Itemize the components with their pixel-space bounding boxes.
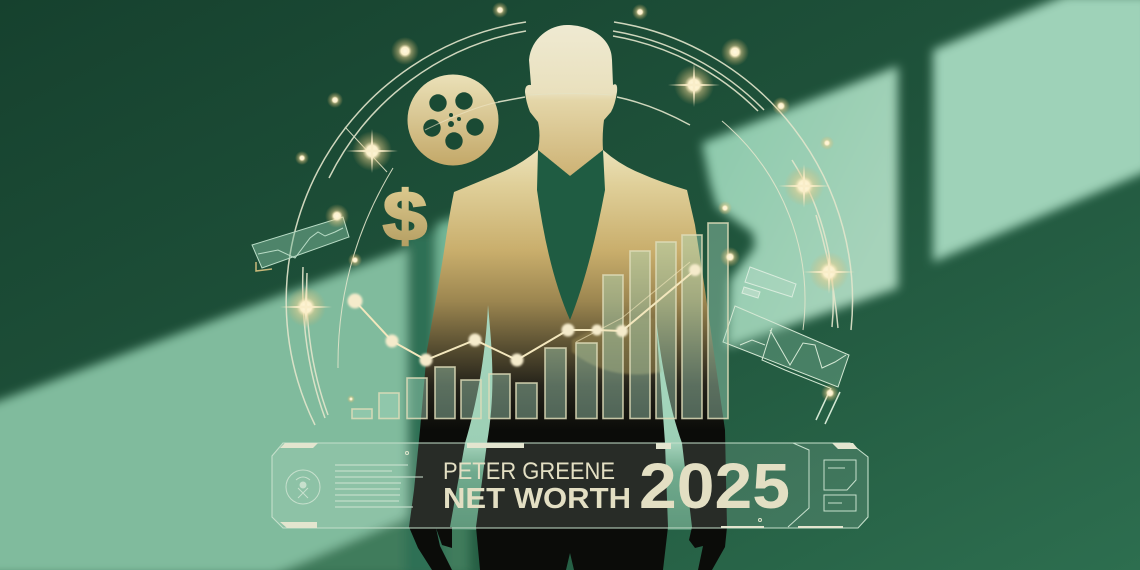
second arc left	[329, 31, 526, 178]
panel dots	[406, 452, 762, 522]
gap: right	[655, 303, 700, 530]
head line	[530, 94, 612, 95]
icon: dollar sign: $	[383, 177, 427, 255]
panel text: name: PETER GREENE	[443, 458, 615, 485]
light patch: far right	[933, 0, 1140, 262]
floating chart: right small	[742, 267, 796, 298]
reel line	[425, 102, 500, 130]
line chart	[348, 262, 701, 366]
title panel	[272, 443, 868, 528]
inner arc right	[722, 121, 805, 330]
lower wall tint	[260, 500, 470, 570]
ear line left	[498, 97, 525, 102]
outer arc left	[286, 22, 526, 425]
left seal icon	[286, 470, 320, 504]
icon: film reel	[408, 74, 498, 166]
ear line right	[617, 97, 690, 125]
inner arc left	[338, 168, 393, 368]
sparkles	[280, 2, 855, 403]
right icons	[788, 443, 856, 527]
left info lines	[335, 465, 423, 507]
light beam: left	[0, 248, 407, 570]
pair arc left	[303, 267, 328, 418]
bar chart	[352, 223, 728, 418]
second arcs right	[613, 31, 764, 111]
panel text: net worth: NET WORTH	[443, 483, 631, 515]
light beam: behind figure	[436, 208, 480, 430]
light patch: centre right with head shadow	[702, 66, 898, 347]
panel frame	[272, 443, 868, 528]
arc right pair	[792, 160, 838, 328]
gap: left	[445, 300, 500, 530]
panel text: year: 2025	[639, 450, 790, 522]
mullion strip	[405, 232, 445, 570]
panel accents	[280, 443, 858, 528]
HUD arcs	[286, 22, 853, 425]
gold reflection	[572, 318, 661, 374]
jacket and arms	[409, 150, 727, 570]
floating chart: right large	[723, 306, 849, 424]
figure gaps between arms and torso	[445, 300, 700, 530]
floating chart: left	[252, 217, 349, 271]
left tick	[345, 127, 387, 172]
outer arc right	[614, 22, 853, 330]
head and neck	[525, 25, 617, 176]
figure silhouette	[409, 25, 727, 570]
shirt V	[537, 150, 605, 320]
